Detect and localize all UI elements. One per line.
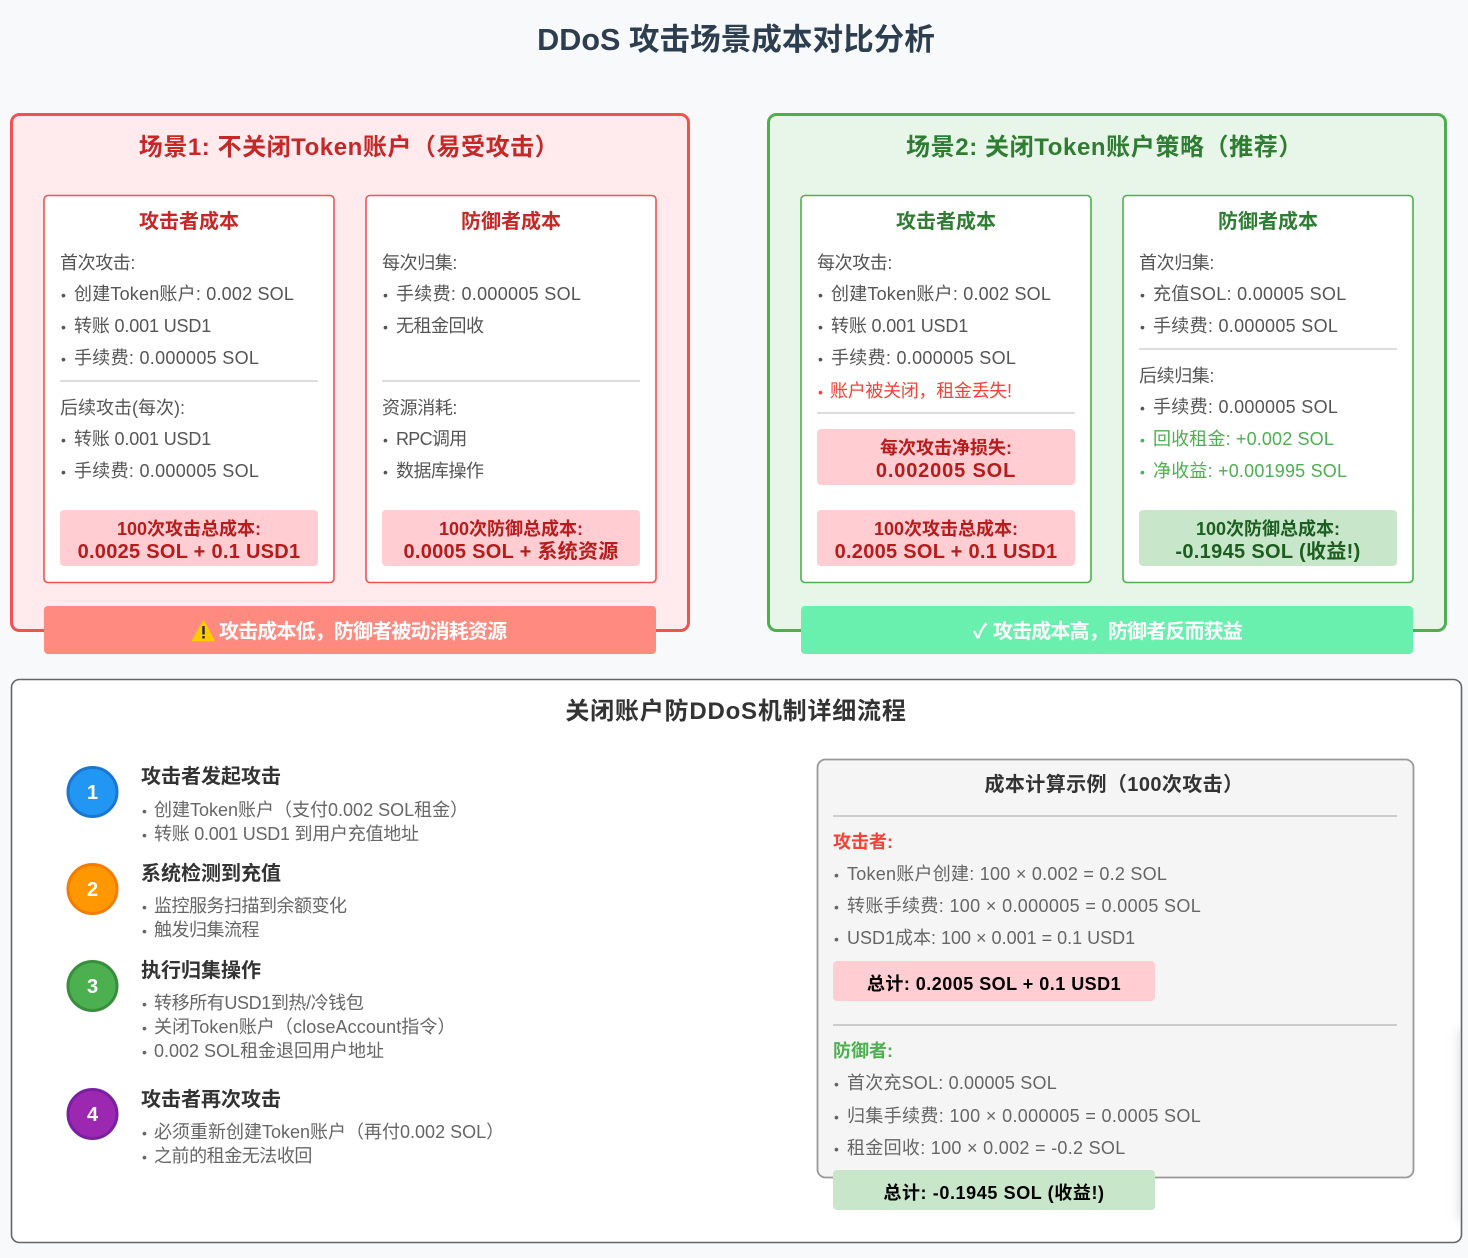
card: scenario 2 attacker cost: 0.2005 SOL + 0.1 USD1 — [835, 541, 1057, 563]
step 2: 2 — [87, 879, 98, 901]
step 2: 触发归集流程 — [154, 920, 259, 940]
step 2 — [68, 861, 347, 940]
card: scenario 2 defender cost: 充值SOL: 0.00005 SOL — [1153, 284, 1347, 304]
card: scenario 1 defender cost: • — [383, 319, 388, 335]
card: scenario 2 defender cost: -0.1945 SOL (收益!) — [1175, 540, 1361, 563]
panel: scenario 2 — [768, 114, 1446, 654]
card: scenario 1 attacker cost: 转账 0.001 USD1 — [74, 429, 211, 449]
card: scenario 1 defender cost: 防御者成本 — [461, 209, 561, 233]
card: scenario 2 attacker cost — [801, 196, 1091, 582]
card: scenario 2 defender cost: 100次防御总成本: — [1196, 518, 1340, 539]
step 3: 3 — [87, 976, 98, 998]
card: scenario 2 defender cost: • — [1140, 464, 1145, 480]
attacker calculation: 转账手续费: 100 × 0.000005 = 0.0005 SOL — [847, 896, 1201, 916]
card: scenario 2 defender cost: 净收益: +0.001995 SOL — [1153, 461, 1347, 481]
card: scenario 2 attacker cost: 每次攻击: — [817, 253, 892, 273]
card: scenario 1 defender cost: • — [383, 432, 388, 448]
card: scenario 1 attacker cost: 攻击者成本 — [139, 209, 239, 233]
flow heading: 关闭账户防DDoS机制详细流程 — [565, 698, 907, 725]
card: scenario 2 defender cost: • — [1140, 287, 1145, 303]
card: scenario 1 defender cost: • — [383, 287, 388, 303]
card: scenario 2 attacker cost: 100次攻击总成本: — [874, 518, 1018, 539]
card: scenario 1 defender cost: 0.0005 SOL + 系统资源 — [403, 539, 619, 563]
scenario 2 heading: 场景2: 关闭Token账户策略（推荐） — [906, 134, 1303, 161]
attacker calculation — [833, 831, 1201, 1001]
attacker calculation: • — [834, 867, 839, 883]
step 4: 必须重新创建Token账户（再付0.002 SOL） — [154, 1122, 504, 1142]
card: scenario 1 defender cost: • — [383, 464, 388, 480]
step 2: • — [142, 923, 147, 939]
card: scenario 1 attacker cost: 手续费: 0.000005 SOL — [74, 348, 259, 368]
card: scenario 1 attacker cost: 100次攻击总成本: — [117, 518, 261, 539]
banner: scenario 2 conclusion: ✓ — [973, 621, 987, 643]
card: scenario 1 attacker cost: • — [61, 432, 66, 448]
step 4: 4 — [87, 1104, 99, 1126]
card: scenario 2 defender cost — [1123, 196, 1413, 582]
card: scenario 2 defender cost: 后续归集: — [1139, 366, 1214, 386]
defender calculation: • — [834, 1109, 839, 1125]
card: scenario 1 attacker cost: • — [61, 351, 66, 367]
card: scenario 1 attacker cost: • — [61, 287, 66, 303]
defender calculation: • — [834, 1076, 839, 1092]
step 2: • — [142, 899, 147, 915]
card: scenario 2 defender cost: 防御者成本 — [1218, 209, 1318, 233]
card: scenario 2 defender cost: 回收租金: +0.002 SOL — [1153, 429, 1334, 449]
card: scenario 1 attacker cost: 首次攻击: — [60, 253, 135, 273]
card: scenario 2 defender cost: 手续费: 0.000005 SOL — [1153, 397, 1338, 417]
attacker calculation: 攻击者: — [833, 831, 893, 852]
card: scenario 1 defender cost: RPC调用 — [396, 429, 467, 449]
card: scenario 2 defender cost: 手续费: 0.000005 SOL — [1153, 316, 1338, 336]
step 3: 关闭Token账户（closeAccount指令） — [154, 1017, 456, 1037]
scenario 1 heading: 场景1: 不关闭Token账户（易受攻击） — [139, 134, 559, 161]
card: scenario 1 defender cost: 无租金回收 — [396, 316, 484, 336]
panel: scenario 1 — [12, 114, 688, 654]
step 3: • — [142, 1020, 147, 1036]
card: scenario 1 defender cost: 资源消耗: — [382, 398, 457, 418]
card: scenario 2 defender cost: • — [1140, 319, 1145, 335]
step 3: • — [142, 1044, 147, 1060]
card: scenario 1 attacker cost: • — [61, 319, 66, 335]
step 1: 1 — [87, 782, 98, 804]
attacker calculation: • — [834, 931, 839, 947]
card: scenario 2 attacker cost: 账户被关闭，租金丢失! — [830, 381, 1012, 401]
defender calculation: 总计: -0.1945 SOL (收益!) — [883, 1183, 1105, 1203]
banner: scenario 2 conclusion — [801, 606, 1413, 654]
card: scenario 1 defender cost: 手续费: 0.000005 SOL — [396, 284, 581, 304]
card: scenario 2 attacker cost: • — [818, 384, 823, 400]
card: scenario 1 attacker cost: 后续攻击(每次): — [60, 398, 185, 418]
card: scenario 1 attacker cost: 创建Token账户: 0.002 SOL — [74, 284, 294, 304]
step 4: 攻击者再次攻击 — [141, 1088, 281, 1111]
step 4: • — [142, 1149, 147, 1165]
card: scenario 2 attacker cost: 每次攻击净损失: — [880, 437, 1012, 458]
card: scenario 1 attacker cost: 转账 0.001 USD1 — [74, 316, 211, 336]
step 1: 攻击者发起攻击 — [141, 765, 281, 788]
step 3: 0.002 SOL租金退回用户地址 — [154, 1041, 384, 1061]
step 3: 执行归集操作 — [141, 959, 261, 982]
step 1: 创建Token账户（支付0.002 SOL租金） — [154, 800, 468, 820]
card: scenario 1 defender cost: 每次归集: — [382, 253, 457, 273]
card: scenario 2 defender cost: 首次归集: — [1139, 253, 1214, 273]
card: scenario 1 attacker cost: • — [61, 464, 66, 480]
panel: cost calculation example — [818, 760, 1414, 1210]
card: scenario 1 attacker cost — [44, 196, 334, 582]
card: scenario 2 defender cost: • — [1140, 400, 1145, 416]
card: scenario 2 attacker cost: 创建Token账户: 0.002 SOL — [831, 284, 1051, 304]
icon: warning — [192, 621, 214, 640]
banner: scenario 1 conclusion — [44, 606, 656, 654]
step 1: 转账 0.001 USD1 到用户充值地址 — [154, 824, 419, 844]
card: scenario 2 attacker cost: 攻击者成本 — [896, 209, 996, 233]
defender calculation: 首次充SOL: 0.00005 SOL — [847, 1073, 1057, 1093]
card: scenario 2 defender cost: • — [1140, 432, 1145, 448]
card: scenario 2 attacker cost: 0.002005 SOL — [876, 460, 1016, 482]
card: scenario 2 attacker cost: • — [818, 287, 823, 303]
step 1: • — [142, 827, 147, 843]
banner: scenario 2 conclusion: 攻击成本高，防御者反而获益 — [993, 619, 1243, 643]
banner: scenario 1 conclusion: 攻击成本低，防御者被动消耗资源 — [219, 619, 507, 643]
step 4 — [68, 1088, 504, 1166]
step 1: • — [142, 803, 147, 819]
card: scenario 2 attacker cost: • — [818, 319, 823, 335]
title: DDoS 攻击场景成本对比分析 — [537, 23, 935, 57]
attacker calculation: USD1成本: 100 × 0.001 = 0.1 USD1 — [847, 928, 1135, 948]
defender calculation: 租金回收: 100 × 0.002 = -0.2 SOL — [847, 1138, 1126, 1158]
card: scenario 2 attacker cost: 转账 0.001 USD1 — [831, 316, 968, 336]
defender calculation — [833, 1040, 1201, 1210]
card: scenario 2 attacker cost: • — [818, 351, 823, 367]
card: scenario 1 defender cost: 100次防御总成本: — [439, 518, 583, 539]
step 4: 之前的租金无法收回 — [154, 1146, 312, 1166]
step 1 — [68, 765, 468, 844]
attacker calculation: Token账户创建: 100 × 0.002 = 0.2 SOL — [847, 864, 1167, 884]
card: scenario 1 attacker cost: 0.0025 SOL + 0.1 USD1 — [78, 541, 300, 563]
step 2: 监控服务扫描到余额变化 — [154, 896, 347, 916]
step 3: • — [142, 996, 147, 1012]
step 3 — [68, 959, 456, 1061]
step 2: 系统检测到充值 — [141, 861, 281, 885]
card: scenario 1 attacker cost: 手续费: 0.000005 SOL — [74, 461, 259, 481]
defender calculation: 防御者: — [833, 1040, 893, 1061]
card: scenario 1 defender cost: 数据库操作 — [396, 461, 484, 481]
defender calculation: • — [834, 1141, 839, 1157]
card: scenario 1 defender cost — [366, 196, 656, 582]
step 3: 转移所有USD1到热/冷钱包 — [154, 993, 364, 1013]
step 4: • — [142, 1125, 147, 1141]
panel: close-account flow — [12, 680, 1468, 1242]
attacker calculation: 总计: 0.2005 SOL + 0.1 USD1 — [867, 974, 1121, 994]
attacker calculation: • — [834, 899, 839, 915]
defender calculation: 归集手续费: 100 × 0.000005 = 0.0005 SOL — [847, 1106, 1201, 1126]
card: scenario 2 attacker cost: 手续费: 0.000005 SOL — [831, 348, 1016, 368]
calculation heading: 成本计算示例（100次攻击） — [985, 772, 1243, 796]
